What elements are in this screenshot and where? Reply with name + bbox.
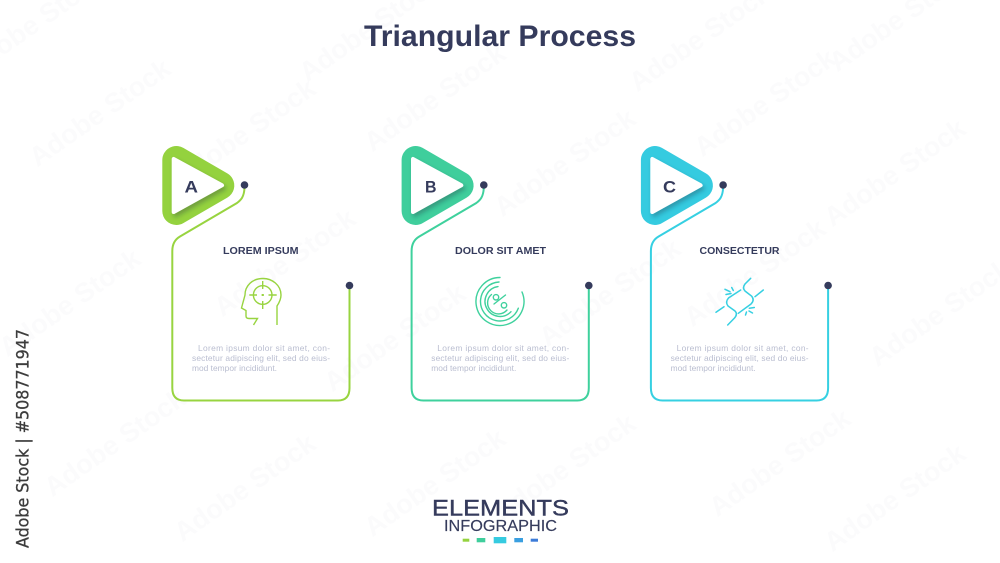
watermark pattern: Adobe Stock xyxy=(24,52,177,172)
text block B: sectetur adipiscing elit, sed do eius- xyxy=(431,353,570,363)
text block B xyxy=(431,343,570,373)
triangle badge B xyxy=(413,159,461,212)
panel: A xyxy=(172,159,353,400)
watermark pattern: Adobe Stock xyxy=(169,72,322,192)
letter B: B xyxy=(425,178,436,196)
triangle badge C xyxy=(652,159,701,212)
panel: B xyxy=(412,159,593,400)
heading C: CONSECTETUR xyxy=(700,245,780,257)
watermark pattern: Adobe Stock xyxy=(704,402,857,522)
icon: radar percent xyxy=(476,277,524,325)
watermark pattern: Adobe Stock xyxy=(534,232,687,352)
connector outline B xyxy=(412,188,589,400)
watermark pattern: Adobe Stock xyxy=(209,202,362,322)
logo: elements infographic: INFOGRAPHIC xyxy=(444,518,557,535)
heading B: DOLOR SIT AMET xyxy=(455,245,547,257)
dot C bottom xyxy=(824,282,832,289)
watermark pattern: Adobe Stock xyxy=(819,437,972,557)
panel: C xyxy=(651,159,832,400)
text block A xyxy=(192,343,330,373)
icon: broken chain xyxy=(716,278,763,325)
triangle badge A xyxy=(174,159,222,212)
watermark pattern: Adobe Stock xyxy=(679,212,832,332)
text block C: sectetur adipiscing elit, sed do eius- xyxy=(671,353,809,363)
dot C top xyxy=(719,181,727,189)
icon: head with target xyxy=(242,278,281,325)
watermark pattern: Adobe Stock xyxy=(359,37,512,157)
text block B: mod tempor incididunt. xyxy=(431,363,516,373)
watermark pattern: Adobe Stock xyxy=(359,422,512,542)
watermark pattern: Adobe Stock xyxy=(169,427,322,547)
text block B: Lorem ipsum dolor sit amet, con- xyxy=(437,343,570,353)
text block A: sectetur adipiscing elit, sed do eius- xyxy=(192,353,330,363)
watermark pattern: Adobe Stock xyxy=(319,277,472,397)
connector outline C xyxy=(651,188,828,400)
text block C: Lorem ipsum dolor sit amet, con- xyxy=(677,343,809,353)
title: Triangular Process xyxy=(364,20,636,53)
letter A: A xyxy=(184,178,198,196)
connector outline A xyxy=(172,188,350,400)
stock id side label: Adobe Stock | #508771947 xyxy=(14,329,34,548)
watermark pattern: Adobe Stock xyxy=(39,382,192,502)
text block C: mod tempor incididunt. xyxy=(671,363,756,373)
dot A bottom xyxy=(346,282,353,289)
text block C xyxy=(671,343,809,373)
dot B top xyxy=(480,181,488,189)
dot B bottom xyxy=(585,282,593,289)
text block A: mod tempor incididunt. xyxy=(192,363,277,373)
logo: elements infographic xyxy=(432,496,569,543)
watermark pattern: Adobe Stock xyxy=(819,112,972,232)
heading A: LOREM IPSUM xyxy=(223,245,299,257)
watermark pattern: Adobe Stock xyxy=(489,102,642,222)
logo colour squares xyxy=(463,537,538,543)
logo: elements infographic: ELEMENTS xyxy=(432,496,569,520)
dot A top xyxy=(241,181,248,189)
watermark pattern: Adobe Stock xyxy=(689,42,842,162)
letter C: C xyxy=(663,178,676,196)
watermark pattern: Adobe Stock xyxy=(489,407,642,527)
text block A: Lorem ipsum dolor sit amet, con- xyxy=(198,343,330,353)
